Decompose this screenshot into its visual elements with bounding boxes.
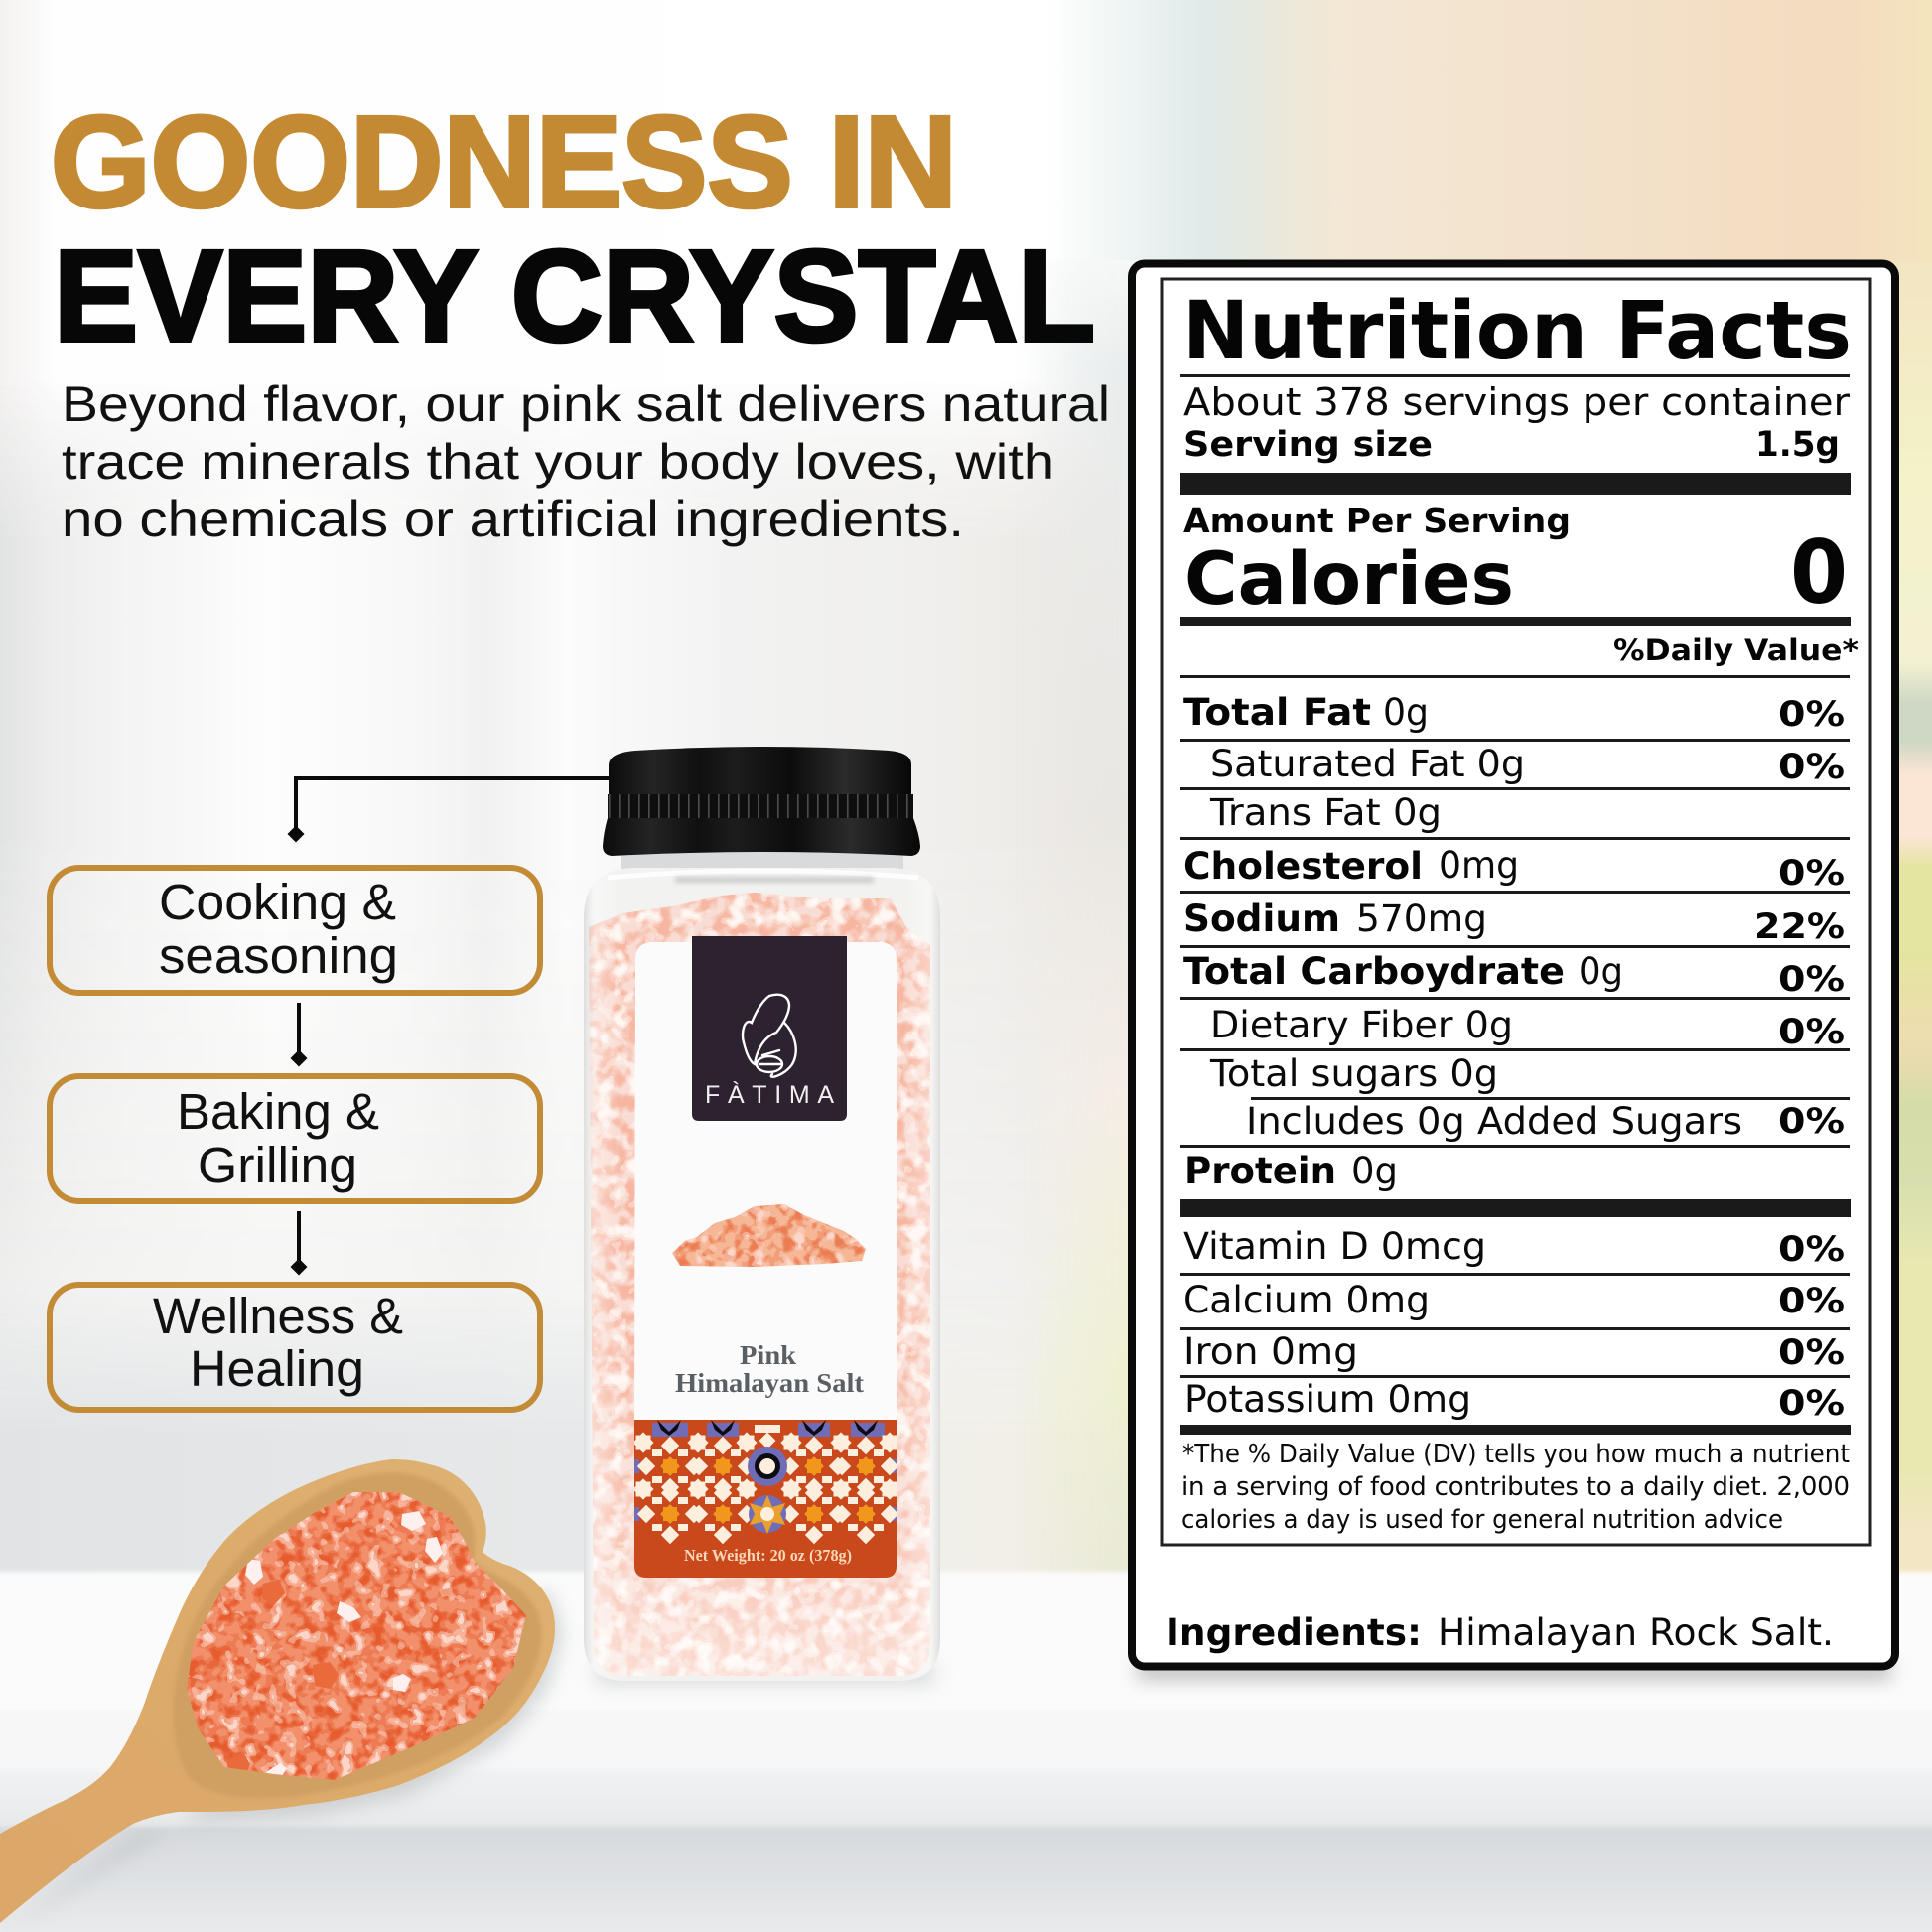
nutrient rows: 0g bbox=[1383, 691, 1429, 734]
rules bbox=[1180, 374, 1851, 1435]
nutrition heading: Nutrition Facts bbox=[1182, 285, 1852, 378]
icon: fatima logo bbox=[743, 995, 796, 1077]
front label bbox=[634, 942, 897, 1430]
jar body bbox=[584, 868, 940, 1681]
nutrient rows: Protein bbox=[1184, 1150, 1336, 1192]
brand name: FÀTIMA bbox=[705, 1080, 834, 1109]
jar neck bbox=[621, 852, 903, 876]
nutrient rows: 0% bbox=[1778, 1102, 1845, 1142]
nutrient rows: 0% bbox=[1778, 1013, 1845, 1052]
title line: every crystal: EVERY CRYSTAL bbox=[54, 222, 1095, 368]
patterned band bbox=[631, 1420, 900, 1578]
usage box: baking and grilling: Grilling bbox=[198, 1137, 357, 1193]
ingredients: Ingredients: bbox=[1166, 1611, 1422, 1654]
nutrient rows: Dietary Fiber 0g bbox=[1210, 1004, 1513, 1046]
arrow: baking to wellness bbox=[291, 1211, 307, 1275]
product name: Himalayan Salt bbox=[675, 1368, 864, 1398]
calories: Calories bbox=[1184, 537, 1514, 621]
product name bbox=[675, 1340, 864, 1398]
product name: Pink bbox=[740, 1340, 796, 1370]
usage box: cooking and seasoning: Cooking & bbox=[159, 874, 396, 930]
centre stars bbox=[748, 1447, 787, 1486]
connector arrow from jar cap to first box bbox=[288, 778, 616, 842]
purple top row bbox=[631, 1423, 899, 1521]
nutrient rows: 0g bbox=[1579, 950, 1623, 993]
footnote: in a serving of food contributes to a daily diet. 2,000 bbox=[1181, 1472, 1850, 1502]
calories bbox=[1183, 501, 1848, 623]
nutrient rows: Vitamin D 0mcg bbox=[1183, 1225, 1486, 1268]
spoon body bbox=[0, 1459, 555, 1923]
nutrient rows: Total Fat bbox=[1183, 691, 1371, 734]
footnote bbox=[1181, 1440, 1850, 1535]
nutrient rows: 0% bbox=[1778, 854, 1845, 894]
title bbox=[51, 88, 1095, 368]
serving info bbox=[1183, 380, 1850, 465]
intro paragraph bbox=[62, 376, 1110, 547]
calories: Amount Per Serving bbox=[1183, 501, 1571, 540]
nutrient rows: Total Carboydrate bbox=[1183, 950, 1565, 993]
footnote: *The % Daily Value (DV) tells you how much a nutrient bbox=[1182, 1440, 1850, 1469]
label salt pile bbox=[672, 1204, 866, 1267]
nutrient rows bbox=[1183, 691, 1845, 1424]
nutrient rows: Includes 0g Added Sugars bbox=[1246, 1100, 1742, 1143]
spoon shadow bbox=[0, 1588, 564, 1932]
wooden spoon with salt bbox=[0, 1459, 564, 1932]
serving info: About 378 servings per container bbox=[1183, 380, 1850, 424]
serving info: 1.5g bbox=[1755, 425, 1840, 465]
ingredients bbox=[1166, 1611, 1834, 1654]
nutrient rows: 0% bbox=[1778, 1333, 1845, 1373]
nutrient rows: 570mg bbox=[1356, 897, 1487, 940]
usage box: wellness and healing: Healing bbox=[190, 1340, 364, 1397]
daily value heading: %Daily Value* bbox=[1613, 633, 1859, 667]
inner frame bbox=[1162, 279, 1870, 1545]
nutrient rows: 0% bbox=[1778, 1282, 1845, 1321]
title line: goodness in: GOODNESS IN bbox=[51, 88, 957, 234]
product jar bbox=[576, 747, 943, 1688]
intro paragraph: trace minerals that your body loves, with bbox=[62, 434, 1054, 489]
nutrient rows: Saturated Fat 0g bbox=[1210, 743, 1525, 785]
spoon salt crystals bbox=[179, 1484, 536, 1787]
nutrient rows: 0mg bbox=[1439, 844, 1519, 887]
intro paragraph: no chemicals or artificial ingredients. bbox=[62, 491, 964, 547]
spoon bowl bbox=[173, 1473, 541, 1798]
nutrient rows: Cholesterol bbox=[1183, 845, 1423, 888]
usage box: cooking and seasoning bbox=[50, 868, 540, 993]
nutrient rows: 0% bbox=[1778, 1230, 1845, 1270]
ingredients: Himalayan Rock Salt. bbox=[1438, 1611, 1834, 1654]
usage box: wellness and healing bbox=[50, 1285, 540, 1410]
arrow: cooking to baking bbox=[291, 1003, 307, 1066]
nutrient rows: 0% bbox=[1778, 748, 1845, 787]
jar cap bbox=[603, 747, 920, 856]
brand block bbox=[692, 936, 847, 1121]
calories: 0 bbox=[1790, 521, 1848, 623]
footnote: calories a day is used for general nutrition advice bbox=[1181, 1505, 1783, 1535]
nutrient rows: Calcium 0mg bbox=[1183, 1279, 1430, 1321]
usage box: wellness and healing: Wellness & bbox=[153, 1288, 403, 1344]
net weight: Net Weight: 20 oz (378g) bbox=[684, 1546, 852, 1565]
nutrient rows: 0g bbox=[1351, 1150, 1398, 1192]
nutrient rows: 0% bbox=[1778, 1384, 1845, 1424]
intro paragraph: Beyond flavor, our pink salt delivers natural bbox=[62, 376, 1110, 432]
nutrient rows: 0% bbox=[1778, 960, 1845, 1000]
nutrient rows: Iron 0mg bbox=[1183, 1330, 1358, 1373]
panel frame bbox=[1132, 264, 1895, 1666]
nutrient rows: 0% bbox=[1778, 695, 1845, 735]
usage box: baking and grilling: Baking & bbox=[177, 1083, 379, 1140]
nutrient rows: 22% bbox=[1754, 907, 1845, 947]
nutrition panel bbox=[1132, 264, 1895, 1680]
usage box: baking and grilling bbox=[50, 1076, 540, 1201]
nutrient rows: Sodium bbox=[1183, 897, 1340, 940]
glass overlay bbox=[584, 868, 940, 1681]
panel shadow bbox=[1137, 1660, 1891, 1680]
jar shadow bbox=[594, 1660, 936, 1686]
nutrient rows: Trans Fat 0g bbox=[1209, 791, 1442, 834]
nutrient rows: Total sugars 0g bbox=[1209, 1052, 1498, 1095]
usage box: cooking and seasoning: seasoning bbox=[159, 927, 398, 984]
salt fill bbox=[576, 884, 943, 1688]
serving info: Serving size bbox=[1183, 425, 1433, 465]
nutrient rows: Potassium 0mg bbox=[1184, 1378, 1471, 1421]
row motifs bbox=[637, 1436, 697, 1490]
